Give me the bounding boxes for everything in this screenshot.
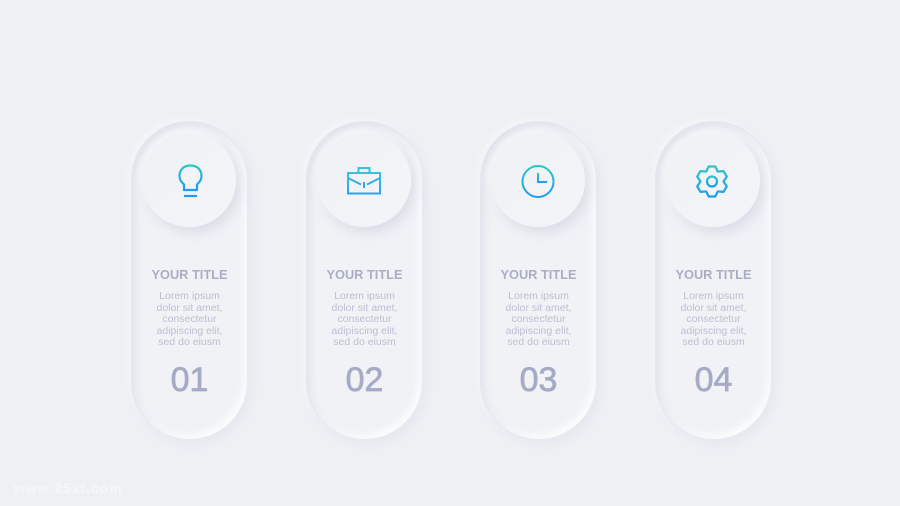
text block: consectetur <box>337 313 392 325</box>
text block: adipiscing elit, <box>332 324 397 336</box>
text block: Lorem ipsum <box>683 290 744 302</box>
text block: Lorem ipsum <box>508 290 569 302</box>
icon: gear <box>696 165 728 198</box>
panel: step 02 <box>306 121 423 440</box>
text block: dolor sit amet, <box>157 302 222 314</box>
panel: step 04 <box>655 121 772 440</box>
text block: Lorem ipsum <box>159 290 220 302</box>
panel: step 01 <box>131 121 248 440</box>
text block <box>681 290 746 348</box>
text block: dolor sit amet, <box>506 302 571 314</box>
text block: dolor sit amet, <box>332 302 397 314</box>
number: 04 <box>695 361 732 399</box>
number: 02 <box>346 361 383 399</box>
text block: adipiscing elit, <box>506 324 571 336</box>
text block: adipiscing elit, <box>681 324 746 336</box>
text block: sed do eiusm <box>507 336 570 348</box>
heading: YOUR TITLE <box>326 267 403 282</box>
text block <box>157 290 222 348</box>
text block: consectetur <box>162 313 217 325</box>
number: 01 <box>171 361 208 399</box>
heading: YOUR TITLE <box>151 267 228 282</box>
heading: YOUR TITLE <box>500 267 577 282</box>
text block <box>332 290 397 348</box>
text block: adipiscing elit, <box>157 324 222 336</box>
icon: briefcase <box>347 167 381 194</box>
icon disc: gear <box>666 133 760 227</box>
text block: dolor sit amet, <box>681 302 746 314</box>
text block: Lorem ipsum <box>334 290 395 302</box>
icon: clock <box>522 165 554 198</box>
icon: light bulb <box>178 164 203 198</box>
number: 03 <box>520 361 557 399</box>
text block: sed do eiusm <box>158 336 221 348</box>
text block: sed do eiusm <box>333 336 396 348</box>
icon disc: clock <box>491 133 585 227</box>
watermark: www.25xt.com <box>14 480 123 496</box>
text block: consectetur <box>686 313 741 325</box>
panel: step 03 <box>480 121 597 440</box>
heading: YOUR TITLE <box>675 267 752 282</box>
text block: sed do eiusm <box>682 336 745 348</box>
text block: consectetur <box>511 313 566 325</box>
icon disc: briefcase <box>317 133 411 227</box>
text block <box>506 290 571 348</box>
icon disc: light bulb <box>142 133 236 227</box>
